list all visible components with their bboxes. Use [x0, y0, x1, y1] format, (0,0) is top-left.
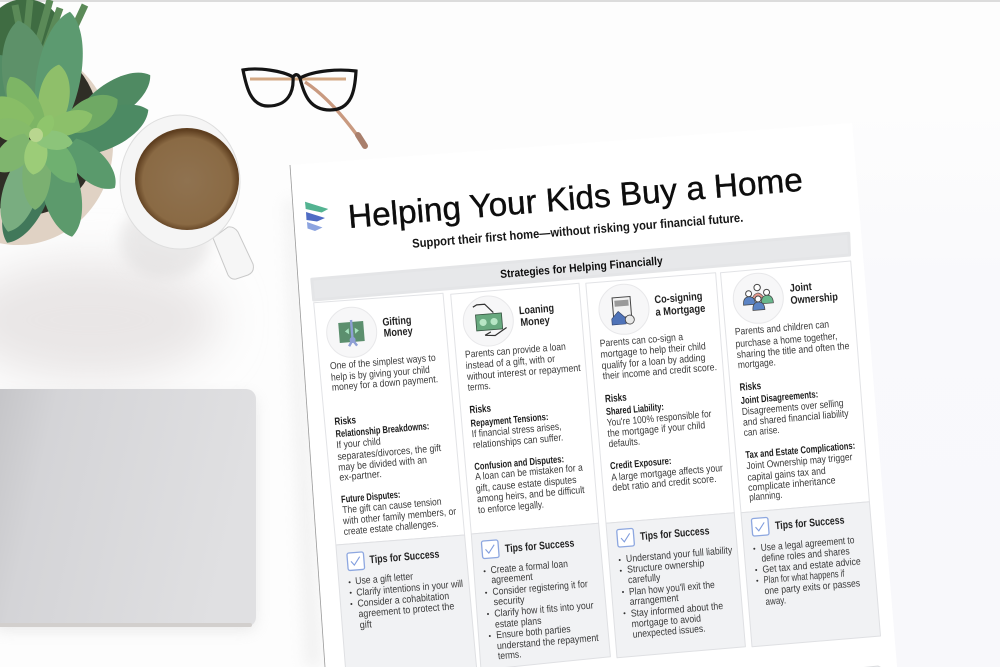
coffee mug	[120, 115, 253, 279]
glasses	[243, 69, 365, 146]
heading	[382, 314, 414, 340]
risks: Joint Disagreements:	[740, 389, 819, 407]
heading: Co-signing	[654, 290, 703, 306]
section banner	[312, 233, 850, 300]
tips list: away.	[765, 595, 786, 608]
risks: Relationship Breakdowns:	[335, 421, 430, 440]
risks: among heirs, and be difficult	[477, 485, 585, 505]
risks: If your child	[336, 436, 381, 451]
risks: planning.	[749, 490, 783, 504]
tips list: Ensure both parties	[496, 624, 571, 641]
icon: hands exchanging money	[463, 296, 513, 346]
tips list: mortgage to avoid	[631, 614, 701, 630]
description: without interest or repayment	[466, 363, 581, 383]
potted succulent	[0, 0, 160, 251]
risks: Risks	[739, 380, 762, 394]
icon: checkbox	[751, 517, 769, 536]
tips list: estate plans	[495, 616, 542, 631]
description: money for a down payment.	[331, 374, 438, 394]
description	[599, 332, 717, 382]
tips list: Plan how you'll exit the	[629, 580, 716, 598]
tips list: unexpected issues.	[632, 624, 706, 641]
risks	[739, 380, 856, 504]
panel: loaning tips: Tips for Success	[505, 538, 575, 555]
subtitle: Support their first home—without risking your financial future.	[412, 211, 744, 251]
tips list: Consider registering it for	[492, 579, 589, 598]
description: Parents and children can	[734, 319, 830, 338]
risks: A large mortgage affects your	[611, 463, 724, 484]
title: Helping Your Kids Buy a Home	[347, 161, 804, 235]
risks: gift, cause estate disputes	[475, 475, 577, 495]
risks: the mortgage if your child	[607, 420, 706, 440]
heading: Gifting	[382, 314, 412, 329]
description: Parents can co-sign a	[599, 332, 684, 350]
tips list	[619, 545, 733, 641]
risks: Disagreements over selling	[741, 398, 844, 418]
risks: You're 100% responsible for	[606, 409, 713, 429]
tips list: Structure ownership	[627, 558, 705, 576]
risks: ex-partner.	[339, 469, 382, 484]
section banner: Strategies for Helping Financially	[500, 255, 664, 281]
panel: joint ownership	[720, 261, 869, 513]
risks: Risks	[604, 392, 627, 405]
tips list: Get tax and estate advice	[762, 556, 862, 576]
tips list: understand the repayment	[497, 633, 599, 652]
tips list: arrangement	[629, 593, 679, 608]
description: sharing the title and often the	[736, 341, 850, 361]
next section banner edge	[745, 666, 882, 667]
tips list	[753, 535, 862, 608]
risks: Risks	[334, 414, 357, 428]
description: terms.	[467, 381, 491, 394]
description: mortgage to help their child	[600, 341, 706, 361]
risks: Tax and Estate Complications:	[745, 441, 856, 461]
tips list: one party exits or passes	[764, 578, 861, 597]
risks: Future Disputes:	[341, 490, 401, 506]
risks: can arise.	[743, 425, 780, 439]
heading	[789, 281, 839, 307]
tips list: Consider a cohabitation	[357, 591, 450, 610]
risks: may be divided with an	[338, 455, 427, 474]
logo	[305, 202, 328, 231]
description	[465, 342, 581, 394]
risks: relationships can suffer.	[473, 432, 564, 451]
tips list: carefully	[628, 573, 661, 586]
tips list: Understand your full liability	[626, 545, 733, 565]
pot and soil	[0, 0, 113, 245]
risks: The gift can cause tension	[342, 497, 442, 516]
heading	[519, 303, 554, 329]
risks: Credit Exposure:	[610, 456, 672, 472]
risks: with other family members, or	[342, 506, 457, 527]
panel: gifting money	[314, 293, 465, 545]
icon: document and house	[599, 284, 649, 334]
tips list: Clarify intentions in your will	[356, 579, 463, 599]
risks: capital gains tax and	[747, 466, 826, 484]
heading: a Mortgage	[655, 303, 706, 319]
tips list: agreement	[491, 572, 533, 586]
risks: to enforce legally.	[478, 500, 544, 516]
tips list: Use a legal agreement to	[760, 535, 855, 554]
description: their income and credit score.	[602, 362, 717, 382]
panel: loaning tips	[471, 523, 610, 667]
laptop	[0, 389, 256, 631]
panel: gifting tips	[336, 535, 480, 667]
risks: debt ratio and credit score.	[612, 474, 717, 494]
icon: group of people	[733, 273, 783, 323]
risks: and shared financial liability	[743, 408, 849, 429]
panel: joint ownership tips: Tips for Success	[775, 515, 845, 532]
risks: create estate challenges.	[343, 519, 439, 538]
page content	[305, 161, 882, 667]
risks: separates/divorces, the gift	[337, 443, 442, 463]
description: mortgage.	[737, 357, 776, 371]
description: qualify for a loan by adding	[601, 353, 706, 372]
tips list: gift	[359, 619, 372, 631]
heading: Money	[520, 315, 551, 329]
risks	[604, 392, 724, 494]
risks: A loan can be mistaken for a	[475, 463, 584, 483]
heading: Loaning	[519, 303, 554, 317]
risks: Confusion and Disputes:	[474, 454, 565, 473]
tips list: agreement to protect the	[358, 601, 455, 620]
paper sheet	[285, 123, 897, 667]
tips list: Use a gift letter	[355, 571, 414, 587]
description	[330, 353, 438, 394]
panel: gifting tips: Tips for Success	[369, 548, 440, 566]
description: Parents can provide a loan	[465, 342, 566, 361]
heading: Money	[383, 325, 414, 340]
tips list: define roles and shares	[761, 546, 850, 565]
icon: checkbox	[347, 552, 365, 571]
panel: co-signing tips: Tips for Success	[640, 525, 710, 543]
tips list: Stay informed about the	[630, 601, 724, 620]
tips list: Clarify how it fits into your	[494, 600, 595, 620]
tips list: security	[493, 595, 525, 608]
risks: complicate inheritance	[748, 475, 836, 494]
risks	[334, 414, 457, 538]
tips list	[484, 559, 599, 662]
panel: loaning money	[451, 283, 599, 534]
tips list: Create a formal loan	[490, 559, 568, 576]
description: purchase a home together,	[735, 331, 838, 350]
description: instead of a gift, with or	[465, 354, 556, 372]
heading	[654, 290, 706, 319]
heading: Joint	[789, 281, 812, 295]
description: help is by giving your child	[331, 365, 430, 384]
risks: Joint Ownership may trigger	[746, 452, 854, 472]
panel: joint ownership tips	[741, 502, 880, 647]
icon: checkbox	[481, 540, 499, 559]
description	[734, 319, 850, 371]
risks	[469, 403, 585, 516]
risks: If financial stress arises,	[471, 421, 562, 440]
panel: co-signing a mortgage	[586, 273, 734, 523]
panel: co-signing tips	[606, 513, 745, 658]
icon: checkbox	[617, 528, 634, 547]
risks: Shared Liability:	[606, 402, 664, 418]
tips list	[349, 571, 463, 631]
tips list: terms.	[498, 649, 522, 662]
risks: Risks	[469, 403, 492, 416]
heading: Ownership	[790, 291, 839, 307]
risks: defaults.	[608, 437, 641, 450]
icon: money with ribbon	[327, 307, 377, 357]
description: One of the simplest ways to	[330, 353, 436, 372]
tips list: Plan for what happens if	[763, 569, 845, 586]
risks: Repayment Tensions:	[470, 412, 549, 430]
